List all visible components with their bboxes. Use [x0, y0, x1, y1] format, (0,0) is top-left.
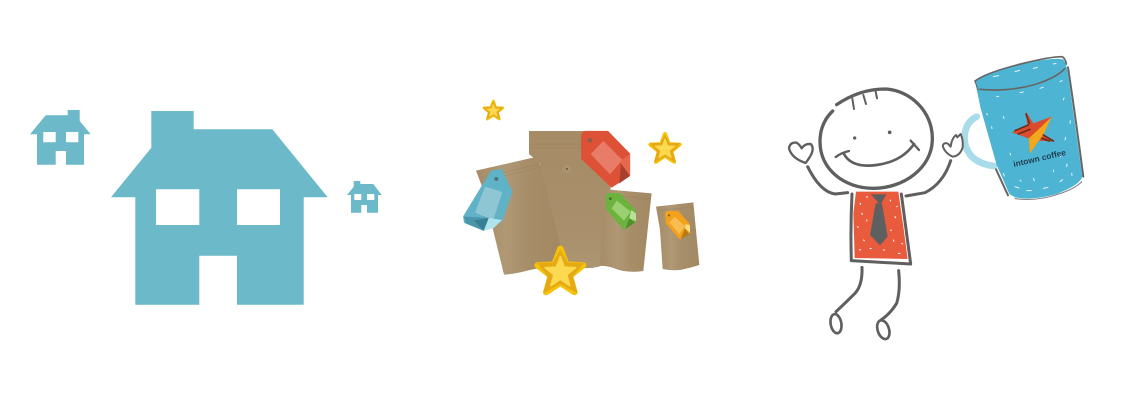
icon: tiny house right: [347, 181, 382, 213]
icon: large house: [111, 111, 328, 305]
left arm and hand: [789, 143, 848, 194]
feet: [829, 313, 892, 341]
mug logo: star: [1012, 112, 1054, 153]
tag: green: [606, 194, 636, 229]
icon: small house left: [30, 110, 91, 165]
coffee bag: left: [476, 157, 561, 275]
tag: blue: [464, 170, 511, 231]
star: large: [537, 249, 584, 293]
coffee bag: right: [599, 189, 652, 272]
tag: red: [582, 132, 630, 187]
mug logo text: intown coffee: [1012, 147, 1067, 169]
tag: orange: [666, 212, 690, 239]
right arm and hand: [906, 134, 963, 196]
star: small: [483, 101, 503, 120]
face: [836, 130, 919, 166]
coffee bag: small: [656, 202, 699, 270]
shirt: [851, 192, 911, 264]
star: medium: [650, 134, 680, 163]
mug handle: [965, 117, 994, 166]
coffee bag: tall centre: [529, 131, 611, 268]
mug: [975, 57, 1083, 199]
illustration: sketched man holding a coffee mug: [789, 57, 1083, 341]
legs: [836, 267, 899, 320]
tie: [870, 194, 888, 245]
illustration: coffee bags with tags and stars: [464, 101, 699, 293]
head: [820, 89, 932, 188]
